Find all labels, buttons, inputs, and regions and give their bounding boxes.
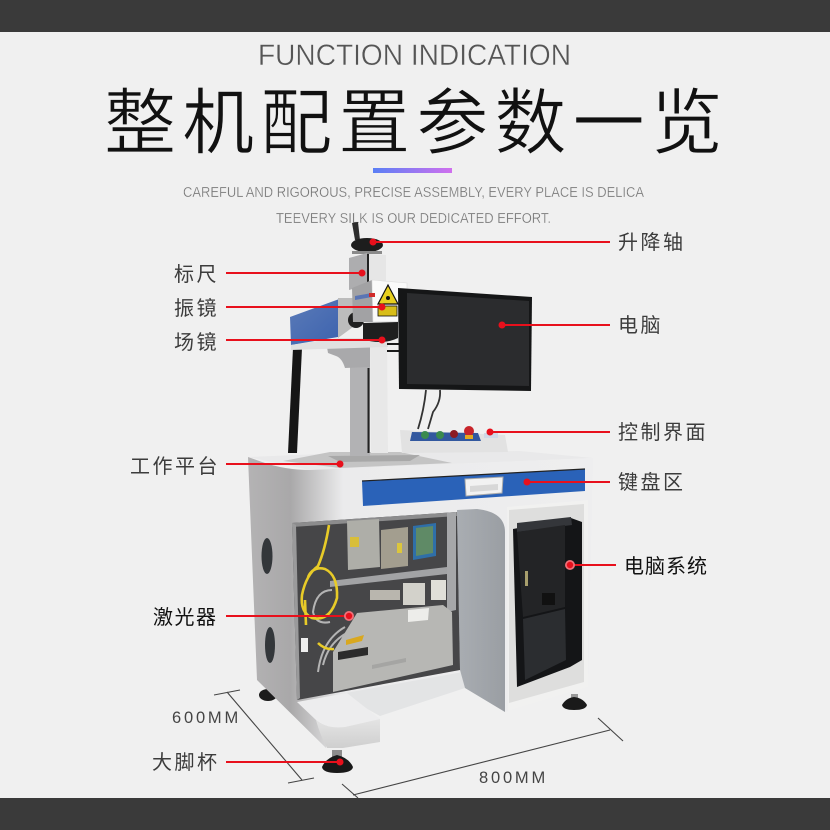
callout: computer xyxy=(498,314,663,337)
support bracket xyxy=(327,345,370,368)
galvo head xyxy=(352,280,407,322)
gradient accent bar xyxy=(373,168,452,173)
english heading: FUNCTION INDICATION xyxy=(258,39,571,72)
callout: galvanometer: 振镜 xyxy=(174,297,219,320)
relay xyxy=(403,583,425,605)
callout: work platform: 工作平台 xyxy=(130,455,220,478)
terminal block xyxy=(370,590,400,600)
top dark band xyxy=(0,0,830,32)
warning label xyxy=(378,306,397,316)
power supply xyxy=(347,519,380,570)
callout: control interface: 控制界面 xyxy=(618,421,708,444)
control board xyxy=(413,523,436,560)
yellow fibre xyxy=(302,525,337,649)
callout: keyboard area xyxy=(524,471,686,494)
working platform xyxy=(283,452,452,468)
field lens xyxy=(363,322,398,342)
control panel xyxy=(400,426,508,453)
callout: foot cup xyxy=(152,751,344,774)
callout: field lens: 场镜 xyxy=(174,331,219,354)
computer bay xyxy=(507,500,588,711)
curved inner wall xyxy=(457,509,505,712)
main title: 整机配置参数一览 xyxy=(104,84,729,164)
dimension 800mm: 800MM xyxy=(479,769,548,787)
blue laser box xyxy=(290,298,364,345)
laser marking machine xyxy=(248,222,593,773)
base arm xyxy=(297,693,380,748)
industrial computer xyxy=(513,518,582,687)
callout: lifting axis xyxy=(370,231,686,254)
driver board xyxy=(381,527,408,569)
callout: laser source: 激光器 xyxy=(153,606,218,629)
lower front strip xyxy=(340,672,465,716)
subtitle line one: CAREFUL AND RIGOROUS, PRECISE ASSEMBLY, EVERY PLACE IS DELICA xyxy=(183,184,644,201)
bottom dark band xyxy=(0,798,830,830)
callout: galvanometer xyxy=(174,297,386,320)
callout: work platform xyxy=(130,455,344,478)
dimension 600mm xyxy=(172,690,314,783)
callout: computer system: 电脑系统 xyxy=(624,555,708,578)
callout: foot cup: 大脚杯 xyxy=(152,751,220,774)
callout: scale ruler: 标尺 xyxy=(174,263,219,286)
subtitle line two: TEEVERY SILK IS OUR DEDICATED EFFORT. xyxy=(276,210,551,227)
callout: field lens xyxy=(174,331,386,354)
rear left foot xyxy=(259,689,277,701)
front foot xyxy=(322,750,353,773)
monitor cables xyxy=(418,390,440,429)
grey cables xyxy=(313,590,345,672)
callout: computer system xyxy=(565,555,708,578)
fibre cable xyxy=(288,348,302,453)
callout: keyboard area: 键盘区 xyxy=(618,471,686,494)
electronics compartment xyxy=(292,512,460,700)
side vents xyxy=(262,538,275,663)
callout: computer: 电脑 xyxy=(618,314,663,337)
callout: lifting axis: 升降轴 xyxy=(618,231,686,254)
callout: scale ruler xyxy=(174,263,366,286)
monitor mount xyxy=(387,343,399,352)
z axis housing xyxy=(349,253,386,290)
laser warning triangle xyxy=(378,285,398,304)
right foot xyxy=(562,694,587,710)
callout: laser source xyxy=(153,606,354,629)
callout: control interface xyxy=(486,421,708,444)
white arm bar xyxy=(291,338,388,350)
vertical rail xyxy=(447,512,456,612)
lifting axis top xyxy=(351,222,383,254)
column xyxy=(350,340,388,456)
monitor xyxy=(398,288,532,391)
metal shelf xyxy=(330,567,447,587)
table top xyxy=(248,451,593,470)
cabinet body xyxy=(248,457,593,748)
dimension 600mm: 600MM xyxy=(172,709,241,727)
blue keyboard drawer xyxy=(362,469,585,506)
laser source box xyxy=(333,605,453,692)
dimension 800mm xyxy=(342,718,623,798)
